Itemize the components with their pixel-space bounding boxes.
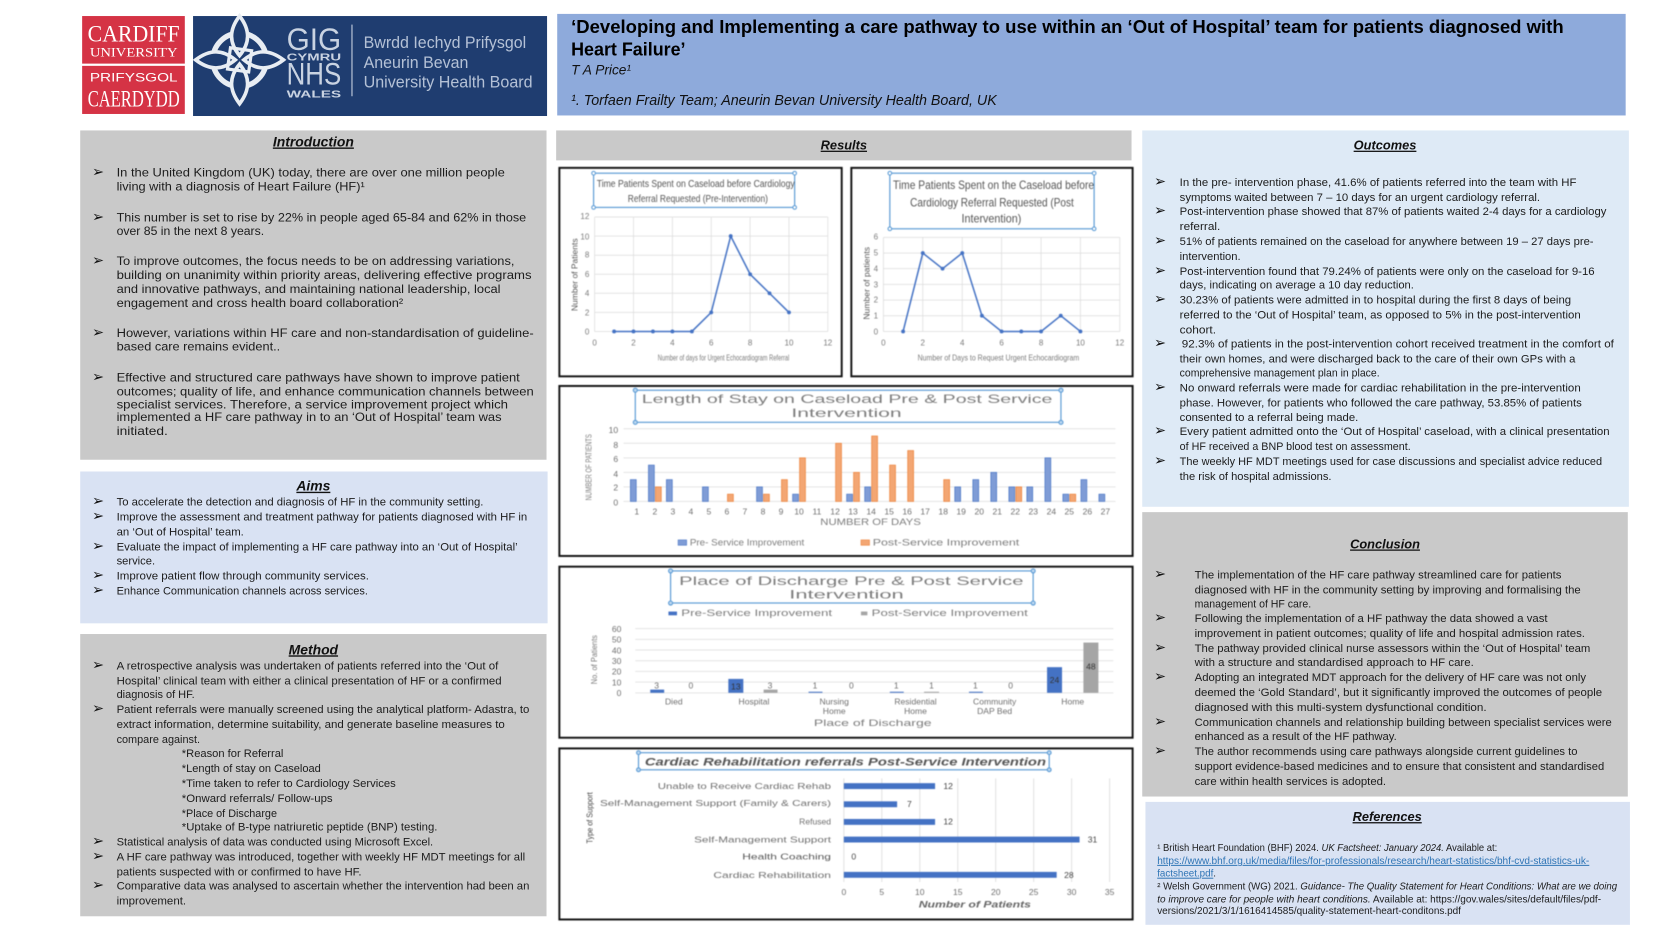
conclusion bullet list: improvement in patient outcomes; quality of life and hospital admission rates.: [1195, 628, 1585, 640]
bar chart: place of discharge: DAP Bed: [977, 706, 1012, 716]
logo: Cardiff University: CARDIFF: [88, 22, 180, 48]
bar chart: cardiac rehabilitation referrals: 20: [991, 887, 1001, 897]
logo: GIG Cymru NHS Wales, Aneurin Bevan University Health Board: Aneurin Bevan: [364, 53, 468, 72]
outcomes bullet list: symptoms waited between 7 – 10 days for an urgent cardiology referral.: [1180, 192, 1540, 204]
bar chart: length of stay on caseload: 2: [652, 506, 657, 516]
bar chart: place of discharge: 30: [612, 656, 622, 666]
conclusion bullet list: ➢: [1154, 669, 1166, 685]
line chart: post-intervention referral time: Time Patients Spent on the Caseload before: [893, 179, 1095, 192]
method bullet list: Comparative data was analysed to ascertain whether the intervention had been an: [117, 881, 529, 893]
outcomes bullet list: days, indicating on average a 10 day reduction.: [1180, 280, 1414, 292]
line chart: post-intervention referral time: 0: [874, 328, 879, 337]
line chart: pre-intervention referral time: 2: [631, 338, 636, 347]
reference list: versions/2021/3/1/1616414585/quality-statement-heart-conditons.pdf: [1157, 906, 1461, 917]
outcomes bullet list: consented to a referral being made.: [1180, 412, 1358, 424]
bar chart: place of discharge: Home: [823, 706, 846, 716]
reference list: ¹ British Heart Foundation (BHF) 2024. UK Factsheet: January 2024. Available at:: [1157, 843, 1497, 854]
logo: Cardiff University: CAERDYDD: [88, 86, 180, 112]
method bullet list: *Onward referrals/ Follow-ups: [182, 793, 333, 805]
bar chart: length of stay on caseload: 5: [706, 506, 711, 516]
bar chart: length of stay on caseload: 2: [613, 483, 618, 493]
bar chart: cardiac rehabilitation referrals: Cardiac Rehabilitation referrals Post-Service Intervention: [645, 757, 1046, 769]
conclusion bullet list: support evidence-based medicines and to ensure that consistent and standardised: [1195, 761, 1604, 773]
method bullet list: extract information, determine suitability, and generate baseline measures to: [117, 719, 505, 731]
conclusion bullet list: ➢: [1154, 566, 1166, 582]
introduction bullet list: building on unanimity within priority areas, delivering effective programs: [117, 268, 532, 282]
outcomes bullet list: ➢: [1154, 453, 1166, 469]
outcomes bullet list: 30.23% of patients were admitted in to hospital during the first 8 days of being: [1180, 295, 1571, 307]
heading: references: References: [1353, 809, 1422, 824]
bar chart: cardiac rehabilitation referrals: 15: [953, 887, 963, 897]
conclusion bullet list: with a structure and standardised approach to HF care.: [1194, 657, 1474, 669]
line chart: pre-intervention referral time: 0: [585, 328, 590, 337]
bar chart: cardiac rehabilitation referrals: Self-Management Support: [694, 835, 832, 844]
bar chart: cardiac rehabilitation referrals: 10: [915, 887, 925, 897]
line chart: pre-intervention referral time: 6: [709, 338, 714, 347]
logo: Cardiff University: [82, 16, 185, 114]
aims bullet list: ➢: [92, 509, 104, 525]
introduction bullet list: ➢: [92, 253, 104, 269]
reference list: [1157, 843, 1618, 917]
conclusion bullet list: The author recommends using care pathways alongside current guidelines to: [1195, 746, 1578, 758]
outcomes bullet list: cohort.: [1180, 325, 1216, 337]
heading: introduction: Introduction: [273, 133, 354, 149]
bar chart: length of stay on caseload: Post-Service Improvement: [873, 537, 1020, 547]
aims bullet list: Evaluate the impact of implementing a HF care pathway into an ‘Out of Hospital’: [117, 542, 518, 554]
affiliation: ¹. Torfaen Frailty Team; Aneurin Bevan University Health Board, UK: [571, 92, 998, 109]
introduction bullet list: ➢: [92, 209, 104, 225]
bar chart: cardiac rehabilitation referrals: 28: [1064, 870, 1074, 880]
outcomes bullet list: ➢: [1154, 379, 1166, 395]
bar chart: length of stay on caseload: 13: [848, 506, 858, 516]
method bullet list: *Length of stay on Caseload: [182, 763, 321, 775]
poster title: Heart Failure’: [571, 39, 686, 60]
bar chart: cardiac rehabilitation referrals: 30: [1067, 887, 1077, 897]
line chart: post-intervention referral time: 4: [960, 338, 965, 347]
conclusion bullet list: management of HF care.: [1195, 598, 1311, 610]
line chart: pre-intervention referral time: Number of days for Urgent Echocardiogram Referral: [658, 353, 789, 362]
line chart: pre-intervention referral time: 6: [585, 270, 590, 279]
bar chart: length of stay on caseload: 3: [670, 506, 675, 516]
bar chart: length of stay on caseload: 8: [761, 506, 766, 516]
outcomes bullet list: Every patient admitted onto the ‘Out of Hospital’ caseload, with a clinical presentation: [1180, 426, 1610, 438]
bar chart: place of discharge: No. of Patients: [590, 635, 599, 684]
line chart: pre-intervention referral time: 10: [580, 232, 590, 241]
bar chart: cardiac rehabilitation referrals: 12: [943, 781, 953, 791]
bar chart: place of discharge: Intervention: [789, 589, 904, 602]
bar chart: length of stay on caseload: 23: [1029, 506, 1038, 516]
conclusion bullet list: [1154, 566, 1612, 788]
bar chart: length of stay on caseload: 19: [956, 506, 966, 516]
bar chart: cardiac rehabilitation referrals: 0: [851, 852, 856, 862]
line chart: post-intervention referral time: 10: [1076, 338, 1085, 347]
outcomes bullet list: The weekly HF MDT meetings used for case discussions and specialist advice reduced: [1180, 456, 1602, 468]
bar chart: place of discharge: Community: [973, 697, 1017, 707]
pre-service bars: [630, 458, 1105, 501]
aims bullet list: Improve the assessment and treatment pathway for patients diagnosed with HF in: [117, 512, 527, 524]
bar chart: cardiac rehabilitation referrals: 7: [907, 799, 912, 809]
introduction bullet list: ➢: [92, 325, 104, 341]
outcomes bullet list: 51% of patients remained on the caseload for anywhere between 19 – 27 days pre-: [1180, 236, 1594, 248]
heading: aims: Aims: [295, 478, 331, 494]
bar chart: cardiac rehabilitation referrals: Number of Patients: [919, 900, 1031, 910]
panel: results header: [556, 130, 1132, 160]
bar chart: length of stay on caseload: 10: [609, 425, 618, 435]
line chart: pre-intervention referral time: 8: [585, 251, 590, 260]
post-service bars: [655, 436, 1076, 501]
bar chart: place of discharge: Home: [1061, 697, 1084, 707]
bar chart: place of discharge: 1: [894, 681, 899, 691]
line chart: pre-intervention referral time: [559, 168, 842, 376]
method bullet list: ➢: [92, 849, 104, 865]
bar chart: length of stay on caseload: 16: [902, 506, 912, 516]
bar chart: length of stay on caseload: 9: [779, 506, 784, 516]
line chart: post-intervention referral time: 6: [999, 338, 1004, 347]
bar chart: place of discharge: 60: [612, 624, 622, 634]
method bullet list: compare against.: [117, 734, 200, 746]
outcomes bullet list: In the pre- intervention phase, 41.6% of patients referred into the team with HF: [1180, 177, 1577, 189]
bar chart: place of discharge: Hospital: [739, 697, 770, 707]
aims bullet list: service.: [117, 556, 155, 568]
method bullet list: Hospital’ clinical team with either a clinical presentation of HF or a confirmed: [117, 675, 502, 687]
heading: conclusion: Conclusion: [1350, 536, 1420, 551]
outcomes bullet list: [1154, 174, 1614, 483]
bar chart: place of discharge: 1: [813, 681, 818, 691]
bar chart: cardiac rehabilitation referrals: 35: [1105, 887, 1115, 897]
bar chart: length of stay on caseload: 21: [992, 506, 1002, 516]
bar chart: length of stay on caseload: 14: [866, 506, 876, 516]
bar chart: place of discharge: 48: [1086, 661, 1096, 671]
bar chart: length of stay on caseload: 4: [689, 506, 694, 516]
bar chart: length of stay on caseload: Pre- Service Improvement: [690, 537, 805, 547]
line chart: post-intervention referral time: 12: [1115, 338, 1125, 347]
poster title: ‘Developing and Implementing a care pathway to use within an ‘Out of Hospital’ team for patients diagnosed with: [571, 16, 1564, 37]
bar chart: cardiac rehabilitation referrals: Type of Support: [586, 792, 595, 844]
bar chart: place of discharge: 0: [1008, 681, 1013, 691]
outcomes bullet list: the risk of hospital admissions.: [1180, 471, 1332, 483]
line chart: pre-intervention referral time: Time Patients Spent on Caseload before Cardiology: [597, 179, 795, 190]
method bullet list: ➢: [92, 878, 104, 894]
bar chart: place of discharge: Residential: [894, 697, 937, 707]
bar chart: length of stay on caseload: Intervention: [791, 407, 902, 420]
bar chart: length of stay on caseload: 6: [725, 506, 730, 516]
reference list: ² Welsh Government (WG) 2021. Guidance- The Quality Statement for Heart Conditions: What are we doing: [1157, 882, 1618, 893]
conclusion bullet list: The pathway provided clinical nurse assessors within the ‘Out of Hospital’ team: [1195, 643, 1590, 655]
logo: GIG Cymru NHS Wales, Aneurin Bevan University Health Board: WALES: [287, 89, 342, 100]
conclusion bullet list: diagnosed with HF in the community setting by improving and formalising the: [1195, 584, 1581, 596]
bar chart: place of discharge: Home: [904, 706, 927, 716]
bar chart: length of stay on caseload: Length of Stay on Caseload Pre & Post Service: [642, 393, 1053, 406]
panel: references: [1145, 802, 1630, 925]
line chart: post-intervention referral time: Cardiology Referral Requested (Post: [910, 196, 1074, 209]
bar chart: place of discharge: 3: [654, 681, 659, 691]
line chart: post-intervention referral time: 2: [921, 338, 926, 347]
bar chart: place of discharge: 0: [689, 681, 694, 691]
bar chart: cardiac rehabilitation referrals: Unable to Receive Cardiac Rehab: [658, 781, 831, 791]
line chart: pre-intervention referral time: 10: [785, 338, 794, 347]
outcomes bullet list: ➢: [1154, 292, 1166, 308]
aims bullet list: an ‘Out of Hospital’ team.: [117, 527, 244, 539]
line chart: pre-intervention referral time: 2: [585, 308, 590, 317]
bar chart: length of stay on caseload: 4: [613, 469, 618, 479]
panel: introduction: [80, 130, 547, 460]
bar chart: cardiac rehabilitation referrals: 31: [1088, 835, 1097, 844]
line chart: post-intervention referral time: Number of patients: [863, 247, 872, 320]
panel: conclusion: [1142, 512, 1628, 797]
logo: GIG Cymru NHS Wales, Aneurin Bevan University Health Board: University Health Board: [364, 72, 533, 91]
aims bullet list: ➢: [92, 539, 104, 555]
bar chart: length of stay on caseload: 6: [613, 454, 618, 464]
line chart: post-intervention referral time: 0: [881, 338, 886, 347]
bar chart: length of stay on caseload: 10: [794, 506, 804, 516]
logo: GIG Cymru NHS Wales, Aneurin Bevan University Health Board: CYMRU: [287, 53, 341, 64]
line chart: pre-intervention referral time: Number of Patients: [571, 238, 580, 311]
introduction bullet list: However, variations within HF care and non-standardisation of guideline-: [117, 326, 534, 340]
bar chart: place of discharge: 13: [731, 682, 741, 692]
aims bullet list: ➢: [92, 494, 104, 510]
line chart: post-intervention referral time: 2: [874, 296, 879, 305]
line chart: post-intervention referral time: [851, 168, 1133, 376]
bar chart: length of stay on caseload: 26: [1083, 506, 1092, 516]
method bullet list: *Reason for Referral: [182, 748, 283, 760]
outcomes bullet list: of HF received a BNP blood test on assessment.: [1180, 441, 1411, 453]
logo: GIG Cymru NHS Wales, Aneurin Bevan University Health Board: GIG: [287, 22, 341, 57]
bar chart: place of discharge: 50: [612, 635, 622, 645]
bar chart: cardiac rehabilitation referrals: 0: [841, 887, 846, 897]
line chart: pre-intervention referral time: 12: [580, 212, 590, 221]
poster title: [571, 16, 1564, 60]
outcomes bullet list: ➢: [1154, 203, 1166, 219]
line chart: post-intervention referral time: Number of Days to Request Urgent Echocardiogram: [918, 353, 1079, 362]
bar chart: place of discharge: 1: [973, 681, 978, 691]
method bullet list: improvement.: [117, 896, 186, 908]
outcomes bullet list: referred to the ‘Out of Hospital’ team, as opposed to 5% in the post-intervention: [1180, 310, 1581, 322]
conclusion bullet list: deemed the ‘Gold Standard’, but it significantly improved the outcomes of people: [1195, 687, 1602, 699]
conclusion bullet list: care within health services is adopted.: [1195, 776, 1386, 788]
outcomes bullet list: Post-intervention found that 79.24% of patients were only on the caseload for 9-16: [1180, 266, 1595, 278]
conclusion bullet list: ➢: [1154, 714, 1166, 730]
introduction bullet list: implemented a HF care pathway in to an ‘Out of Hospital’ team was: [117, 410, 502, 424]
method bullet list: *Place of Discharge: [182, 808, 277, 820]
method bullet list: Patient referrals were manually screened using the analytical platform- Adastra, to: [117, 704, 529, 716]
bar chart: place of discharge: Nursing: [819, 697, 849, 707]
reference list: https://www.bhf.org.uk/media/files/for-professionals/research/heart-statistics/bhf-cvd-statistics-uk-: [1157, 856, 1589, 867]
bar chart: length of stay on caseload: 22: [1011, 506, 1020, 516]
introduction bullet list: initiated.: [117, 424, 168, 438]
bar chart: place of discharge: 0: [617, 688, 622, 698]
heading: method: Method: [289, 641, 339, 657]
line chart: pre-intervention referral time: Referral Requested (Pre-Intervention): [628, 194, 768, 205]
bar chart: place of discharge: Died: [665, 697, 683, 707]
introduction bullet list: ➢: [92, 370, 104, 386]
aims bullet list: Improve patient flow through community services.: [117, 570, 369, 582]
outcomes bullet list: ➢: [1154, 263, 1166, 279]
introduction bullet list: To improve outcomes, the focus needs to be on addressing variations,: [117, 254, 514, 268]
logo: GIG Cymru NHS Wales, Aneurin Bevan University Health Board: [193, 16, 547, 116]
bar chart: length of stay on caseload: 18: [938, 506, 948, 516]
introduction bullet list: over 85 in the next 8 years.: [117, 224, 264, 238]
introduction bullet list: [92, 164, 534, 438]
introduction bullet list: ➢: [92, 164, 104, 180]
heading: results: Results: [821, 138, 867, 153]
outcomes bullet list: their own homes, and were discharged back to the care of their own GPs with a: [1180, 353, 1575, 365]
outcomes bullet list: intervention.: [1180, 251, 1241, 263]
author: T A Price¹: [571, 61, 631, 77]
bar chart: place of discharge: Place of Discharge Pre & Post Service: [679, 575, 1024, 588]
outcomes bullet list: comprehensive management plan in place.: [1180, 367, 1380, 379]
bar chart: cardiac rehabilitation referrals: Cardiac Rehabilitation: [713, 870, 831, 880]
bar chart: place of discharge: Pre-Service Improvement: [681, 608, 833, 618]
introduction bullet list: specialist services. Therefore, a service improvement project which: [117, 397, 508, 411]
conclusion bullet list: Following the implementation of a HF pathway the data showed a vast: [1195, 613, 1548, 625]
method bullet list: *Uptake of B-type natriuretic peptide (BNP) testing.: [182, 822, 437, 834]
bar chart: place of discharge: 24: [1050, 675, 1060, 685]
logo: Cardiff University: PRIFYSGOL: [90, 70, 178, 84]
bar chart: length of stay on caseload: [559, 386, 1133, 556]
bar chart: cardiac rehabilitation referrals: 5: [879, 887, 884, 897]
bar chart: length of stay on caseload: NUMBER OF DAYS: [820, 517, 921, 527]
aims bullet list: Enhance Communication channels across services.: [117, 585, 368, 597]
line chart: pre-intervention referral time: 0: [592, 338, 597, 347]
introduction bullet list: This number is set to rise by 22% in people aged 65-84 and 62% in those: [117, 210, 526, 224]
conclusion bullet list: diagnosed with this multi-system dysfunctional condition.: [1195, 702, 1487, 714]
bar chart: length of stay on caseload: 20: [974, 506, 984, 516]
introduction bullet list: Effective and structured care pathways have shown to improve patient: [117, 371, 520, 385]
bar chart: length of stay on caseload: 0: [613, 498, 618, 508]
bar chart: place of discharge: 1: [929, 681, 934, 691]
conclusion bullet list: ➢: [1154, 743, 1166, 759]
bar chart: place of discharge: 10: [612, 677, 622, 687]
method bullet list: patients suspected with or confirmed to have HF.: [117, 867, 361, 879]
outcomes bullet list: ➢: [1154, 423, 1166, 439]
panel: aims: [80, 472, 548, 623]
bar chart: place of discharge: Post-Service Improvement: [872, 608, 1028, 618]
bar chart: length of stay on caseload: 11: [813, 506, 822, 516]
aims bullet list: ➢: [92, 582, 104, 598]
method bullet list: ➢: [92, 701, 104, 717]
line chart: pre-intervention referral time: 12: [823, 338, 833, 347]
introduction bullet list: and innovative pathways, and maintaining national leadership, local: [117, 282, 501, 296]
bar chart: place of discharge: 40: [612, 645, 622, 655]
logo: GIG Cymru NHS Wales, Aneurin Bevan University Health Board: Bwrdd Iechyd Prifysgol: [364, 33, 526, 52]
method bullet list: [92, 657, 529, 908]
bar chart: length of stay on caseload: 15: [884, 506, 894, 516]
bar chart: length of stay on caseload: 7: [743, 506, 748, 516]
introduction bullet list: engagement and cross health board collaboration²: [117, 296, 403, 310]
bar chart: place of discharge: 3: [768, 681, 773, 691]
bar chart: length of stay on caseload: 27: [1101, 506, 1110, 516]
logo: GIG Cymru NHS Wales, Aneurin Bevan University Health Board: NHS: [287, 56, 341, 91]
logo: Cardiff University: UNIVERSITY: [90, 46, 178, 60]
bar chart: length of stay on caseload: 24: [1047, 506, 1056, 516]
panel: outcomes: [1142, 130, 1629, 507]
aims bullet list: ➢: [92, 567, 104, 583]
bar chart: cardiac rehabilitation referrals: Refused: [799, 816, 831, 826]
bar chart: place of discharge: [559, 567, 1133, 738]
line chart: post-intervention referral time: 6: [874, 232, 879, 241]
outcomes bullet list: ➢: [1154, 335, 1166, 351]
conclusion bullet list: ➢: [1154, 640, 1166, 656]
line chart: post-intervention referral time: Intervention): [961, 212, 1021, 225]
outcomes bullet list: No onward referrals were made for cardiac rehabilitation in the pre-intervention: [1180, 382, 1581, 394]
bar chart: length of stay on caseload: 25: [1065, 506, 1074, 516]
bar chart: cardiac rehabilitation referrals: 25: [1029, 887, 1039, 897]
outcomes bullet list: ➢: [1154, 233, 1166, 249]
line chart: pre-intervention referral time: 8: [748, 338, 753, 347]
outcomes bullet list: ➢: [1154, 174, 1166, 190]
aims bullet list: To accelerate the detection and diagnosis of HF in the community setting.: [117, 497, 483, 509]
conclusion bullet list: Adopting an integrated MDT approach for the delivery of HF care was not only: [1195, 672, 1587, 684]
conclusion bullet list: Communication channels and relationship building between specialist services were: [1195, 717, 1612, 729]
introduction bullet list: living with a diagnosis of Heart Failure (HF)¹: [117, 179, 365, 193]
line chart: post-intervention referral time: 1: [874, 312, 879, 321]
outcomes bullet list: Post-intervention phase showed that 87% of patients waited 2-4 days for a cardiology: [1180, 206, 1607, 218]
method bullet list: ➢: [92, 657, 104, 673]
method bullet list: A HF care pathway was introduced, together with weekly HF MDT meetings for all: [117, 852, 525, 864]
reference list: factsheet.pdf.: [1157, 869, 1216, 880]
introduction bullet list: outcomes; quality of life, and enhance communication channels between: [117, 385, 534, 399]
heading: outcomes: Outcomes: [1354, 138, 1416, 153]
conclusion bullet list: ➢: [1154, 610, 1166, 626]
introduction bullet list: based care remains evident..: [117, 340, 280, 354]
bar chart: place of discharge: 0: [849, 681, 854, 691]
bar chart: length of stay on caseload: NUMBER OF PATIENTS: [584, 434, 593, 500]
outcomes bullet list: 92.3% of patients in the post-intervention cohort received treatment in the comfort of: [1182, 338, 1614, 350]
conclusion bullet list: The implementation of the HF care pathway streamlined care for patients: [1195, 569, 1561, 581]
bar chart: length of stay on caseload: 17: [920, 506, 930, 516]
outcomes bullet list: referral.: [1180, 221, 1220, 233]
title panel: [557, 14, 1626, 115]
bar chart: length of stay on caseload: 12: [830, 506, 840, 516]
bar chart: cardiac rehabilitation referrals: 12: [943, 816, 953, 826]
line chart: post-intervention referral time: 5: [874, 249, 879, 258]
method bullet list: A retrospective analysis was undertaken of patients referred into the ‘Out of: [117, 660, 499, 672]
method bullet list: Statistical analysis of data was conducted using Microsoft Excel.: [117, 837, 433, 849]
reference list: to improve care for people with heart conditions. Available at: https://gov.wales/sites/default/files/pdf-: [1157, 894, 1601, 905]
bar chart: place of discharge: 20: [612, 667, 622, 677]
bar chart: cardiac rehabilitation referrals: Health Coaching: [742, 852, 831, 862]
line chart: post-intervention referral time: 4: [874, 265, 879, 274]
line chart: post-intervention referral time: 8: [1039, 338, 1044, 347]
conclusion bullet list: enhanced as a result of the HF pathway.: [1195, 731, 1397, 743]
method bullet list: *Time taken to refer to Cardiology Services: [182, 778, 396, 790]
bar chart: place of discharge: Place of Discharge: [814, 718, 932, 728]
bar chart: cardiac rehabilitation referrals: Self-Management Support (Family & Carers): [600, 798, 831, 808]
line chart: pre-intervention referral time: 4: [585, 289, 590, 298]
panel: method: [80, 634, 547, 916]
line chart: post-intervention referral time: 3: [874, 281, 879, 290]
method bullet list: ➢: [92, 834, 104, 850]
aims bullet list: [92, 494, 527, 598]
bar chart: length of stay on caseload: 8: [613, 440, 618, 450]
line chart: pre-intervention referral time: 4: [670, 338, 675, 347]
outcomes bullet list: phase. However, for patients who followed the care pathway, 53.85% of patients: [1180, 397, 1582, 409]
bar chart: cardiac rehabilitation referrals: [559, 748, 1133, 919]
method bullet list: diagnosis of HF.: [117, 689, 195, 701]
bar chart: length of stay on caseload: 1: [634, 506, 639, 516]
introduction bullet list: In the United Kingdom (UK) today, there are over one million people: [117, 165, 505, 179]
